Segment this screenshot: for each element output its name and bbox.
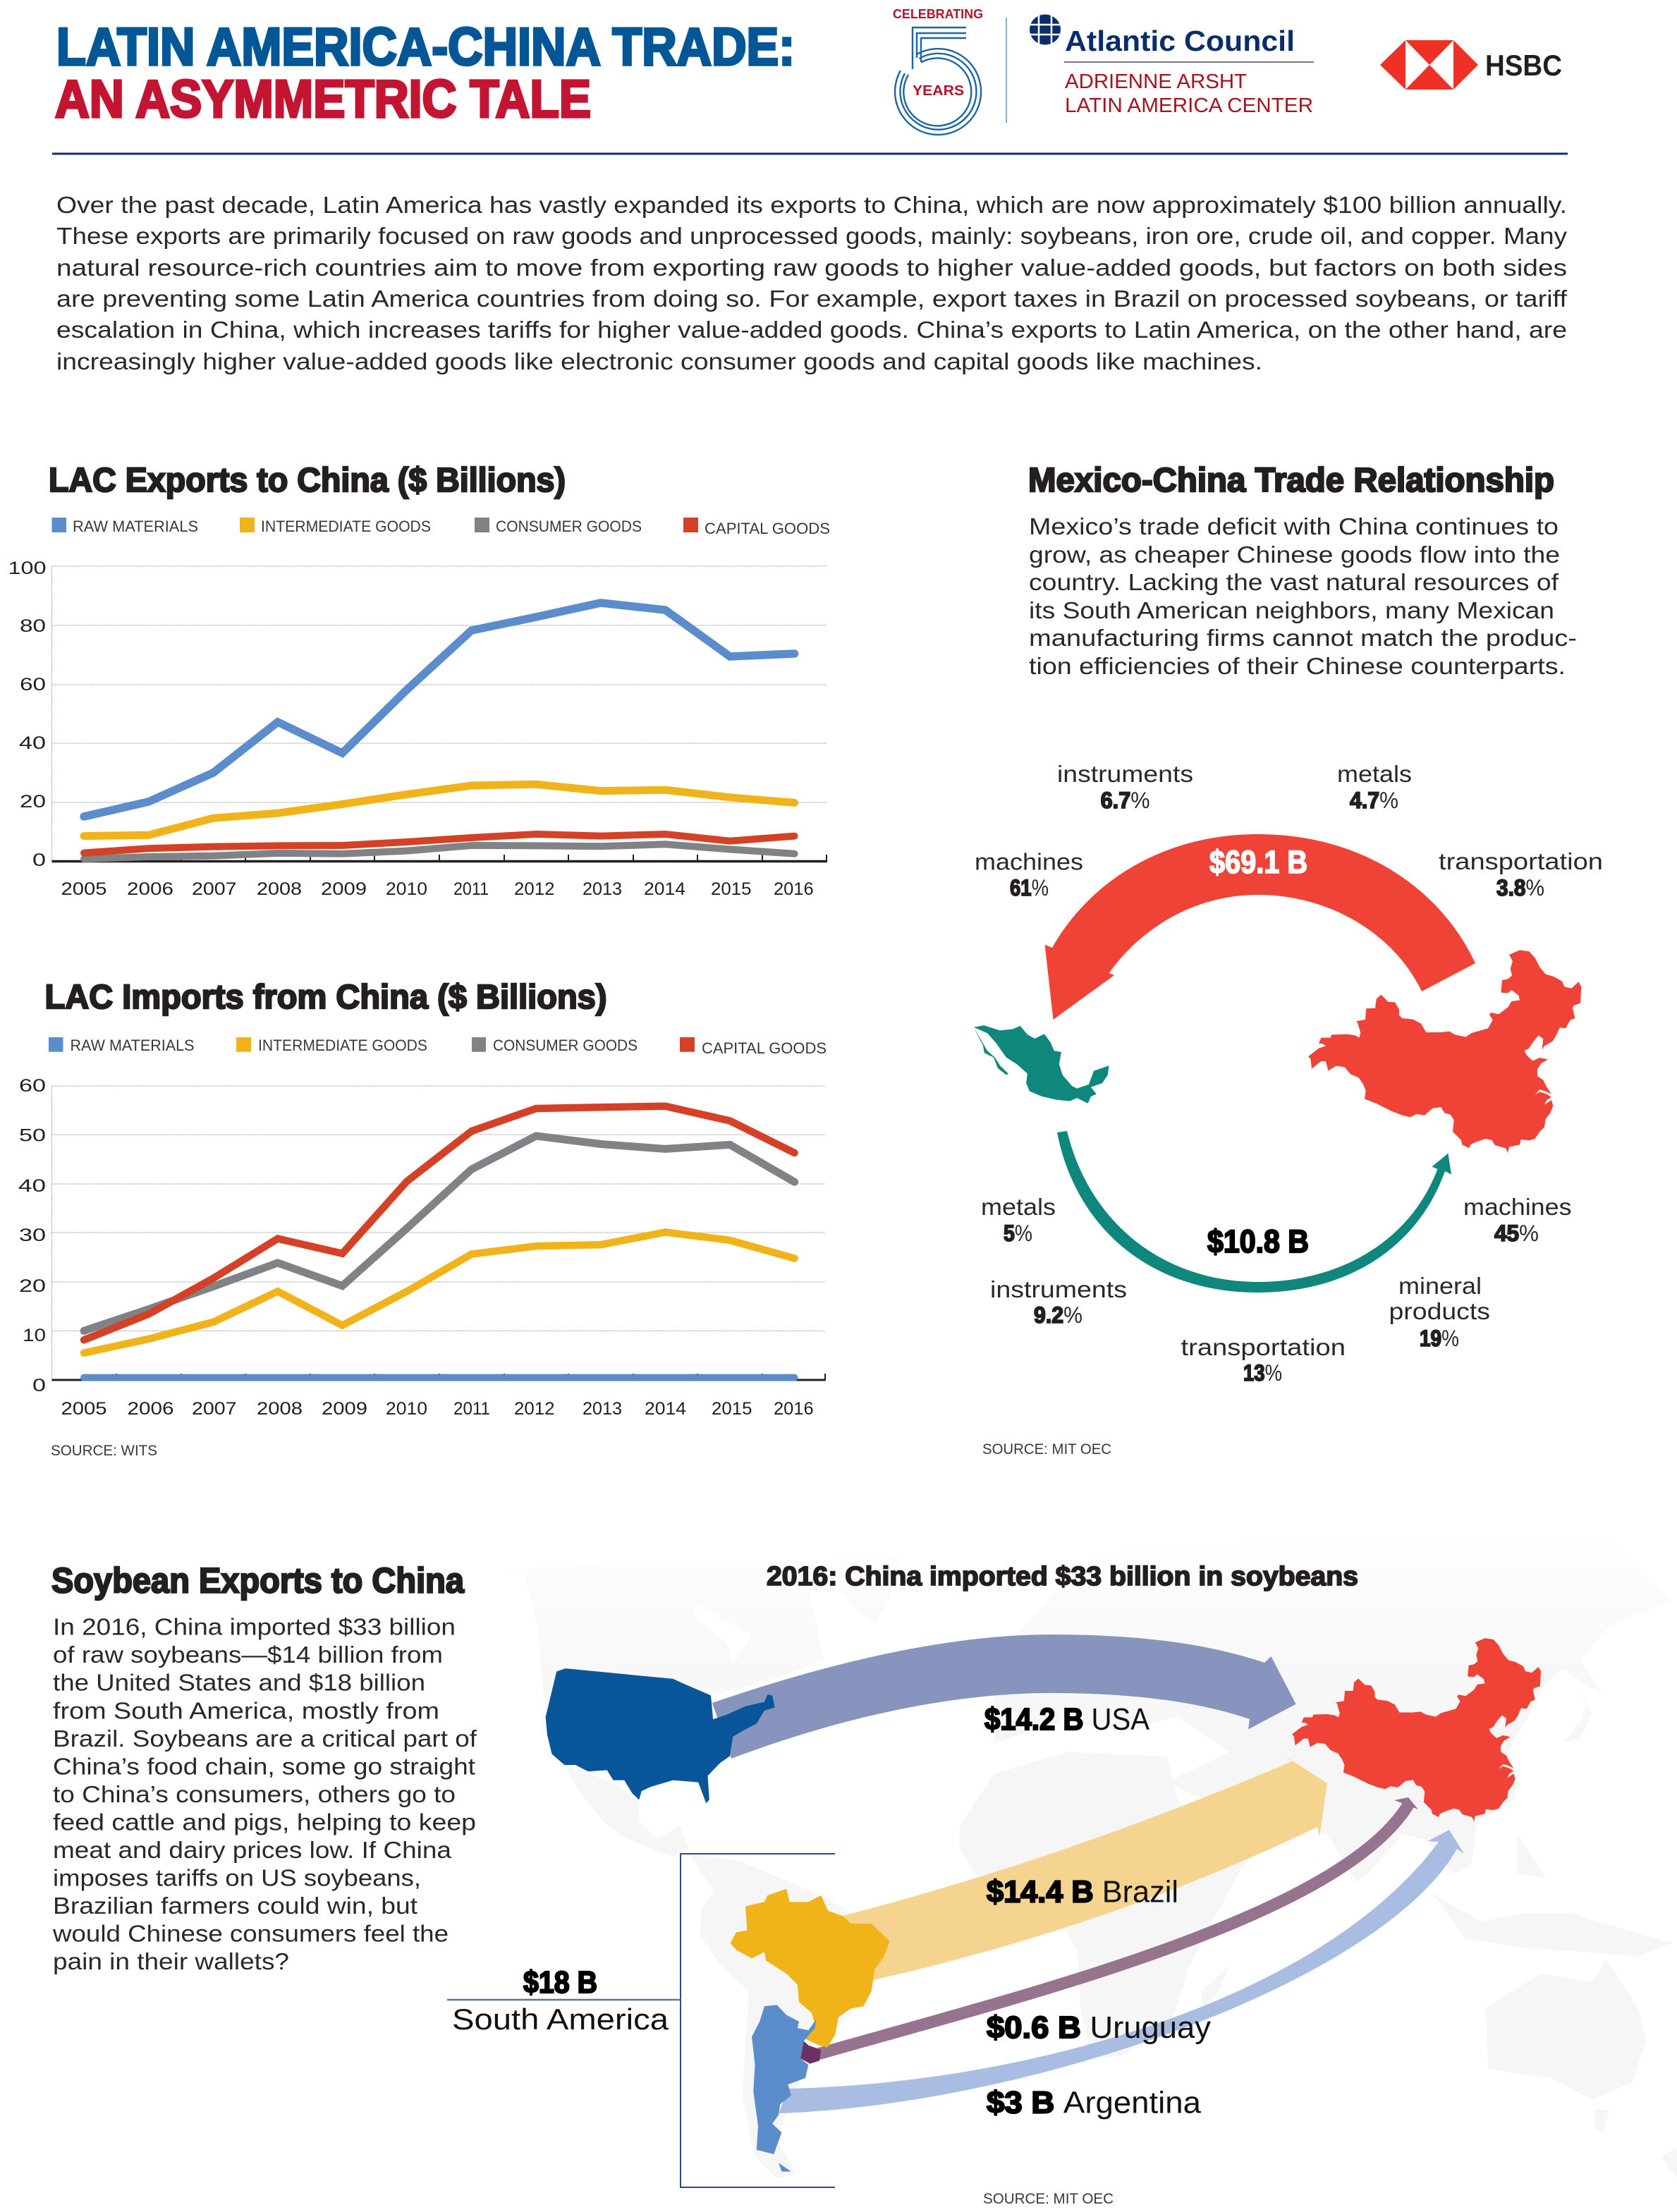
map: Mexico <box>974 1025 1109 1104</box>
intro paragraph: escalation in China, which increases tariffs for higher value-added goods. China’s exports to Latin America, on the other hand, are <box>56 317 1567 343</box>
text block: Mexico-China: its South American neighbors, many Mexican <box>1029 597 1554 623</box>
heading: 2016 China imports: 2016: China imported $33 billion in soybeans <box>767 1562 1358 1591</box>
chart: exports line chart: 2012 <box>514 879 554 899</box>
logo: Atlantic Council 5 years: YEARS <box>913 83 964 99</box>
text block: soybean exports: In 2016, China imported $33 billion <box>53 1614 456 1640</box>
chart: imports line chart <box>18 1076 825 1419</box>
labels: Mexico exports breakdown <box>981 1194 1571 1386</box>
chart: exports line chart <box>8 558 827 899</box>
intro paragraph: Over the past decade, Latin America has vastly expanded its exports to China, which are now approximately $100 billion annually. <box>56 192 1567 218</box>
labels: Mexico exports breakdown: 45% <box>1494 1221 1539 1246</box>
labels: China exports breakdown: metals <box>1337 761 1412 787</box>
text block: soybean exports: of raw soybeans—$14 billion from <box>53 1642 443 1668</box>
chart: exports line chart: 2008 <box>257 879 302 899</box>
labels: Mexico exports breakdown: mineral <box>1398 1273 1482 1299</box>
panel: Mexico-China trade relationship <box>974 462 1603 1458</box>
chart: imports line chart: 0 <box>32 1376 46 1395</box>
logo: Atlantic Council 5 years <box>893 7 1314 135</box>
label: Brazil value: $14.4 B Brazil <box>987 1874 1178 1909</box>
chart: exports line chart: 100 <box>8 558 47 578</box>
text block: Mexico-China: manufacturing firms cannot match the produc- <box>1029 625 1577 651</box>
source: MIT OEC soybeans: SOURCE: MIT OEC <box>983 2191 1114 2207</box>
title: LATIN AMERICA-CHINA TRADE: <box>56 17 795 76</box>
text block: soybean exports: imposes tariffs on US soybeans, <box>53 1865 421 1891</box>
intro paragraph: natural resource-rich countries aim to move from exporting raw goods to higher value-added goods, but factors on both sides <box>56 255 1567 281</box>
labels: Mexico exports breakdown: transportation <box>1181 1334 1346 1360</box>
chart: exports line chart: 2011 <box>453 879 489 899</box>
title: AN ASYMMETRIC TALE <box>55 69 591 128</box>
map: China <box>1308 950 1581 1153</box>
labels: Mexico exports breakdown: machines <box>1463 1194 1571 1220</box>
intro paragraph: increasingly higher value-added goods like electronic consumer goods and capital goods like machines. <box>56 348 1262 374</box>
label: Uruguay value: $0.6 B Uruguay <box>987 2010 1211 2045</box>
labels: China exports breakdown: transportation <box>1439 848 1603 874</box>
labels: China exports breakdown: 3.8% <box>1496 875 1544 900</box>
chart: exports line chart: 60 <box>20 675 46 695</box>
labels: Mexico exports breakdown: 5% <box>1004 1221 1032 1246</box>
label: $18 B South America <box>447 1965 681 2036</box>
labels: Mexico exports breakdown: products <box>1389 1298 1490 1324</box>
labels: China exports breakdown: 61% <box>1010 875 1049 900</box>
chart: imports line chart: 40 <box>18 1176 46 1196</box>
legend: imports: INTERMEDIATE GOODS <box>258 1037 427 1054</box>
value: $10.8 B: $10.8 B <box>1207 1223 1309 1259</box>
logo: Atlantic Council 5 years: CELEBRATING <box>893 7 983 21</box>
text block: soybean exports: from South America, mostly from <box>53 1697 439 1723</box>
chart: exports line chart: 2010 <box>386 879 427 899</box>
legend: imports: CAPITAL GOODS <box>702 1039 827 1057</box>
text block: soybean exports: to China’s consumers, others go to <box>53 1781 456 1807</box>
intro paragraph <box>56 192 1568 374</box>
logo: HSBC <box>1380 40 1562 90</box>
map: faint world background <box>494 1534 1677 2178</box>
text block: soybean exports: feed cattle and pigs, helping to keep <box>53 1809 476 1835</box>
legend: exports: INTERMEDIATE GOODS <box>261 518 431 535</box>
chart: imports line chart: 2005 <box>61 1399 107 1419</box>
map: USA <box>546 1668 775 1803</box>
chart: exports line chart: 40 <box>19 733 46 753</box>
legend: exports: CONSUMER GOODS <box>496 518 642 535</box>
chart: exports line chart: 2009 <box>321 879 367 899</box>
text block: soybean exports: Brazilian farmers could win, but <box>53 1893 417 1919</box>
map: China destination <box>1292 1638 1541 1821</box>
chart: imports line chart: 2010 <box>386 1399 427 1419</box>
chart: exports line chart: 2014 <box>644 879 685 899</box>
chart: imports line chart: 2013 <box>583 1399 622 1419</box>
chart: imports line chart: 50 <box>19 1125 46 1145</box>
text block: Mexico-China: country. Lacking the vast natural resources of <box>1029 569 1559 595</box>
legend: exports <box>52 518 830 537</box>
arrow: Argentina to China <box>779 1830 1464 2113</box>
chart: imports line chart: 2015 <box>712 1399 752 1419</box>
source: WITS: SOURCE: WITS <box>51 1443 157 1459</box>
labels: China exports breakdown: machines <box>975 849 1083 874</box>
chart: exports line chart: 2013 <box>583 879 622 899</box>
logo: Atlantic Council 5 years: Atlantic Council <box>1065 25 1295 57</box>
chart: imports line chart: 2009 <box>322 1399 367 1419</box>
legend: imports <box>49 1037 827 1057</box>
value: $69.1 B: $69.1 B <box>1209 844 1307 880</box>
legend: exports: CAPITAL GOODS <box>705 520 830 537</box>
title <box>55 17 795 128</box>
panel: soybean exports <box>51 1534 1677 2207</box>
legend: exports: RAW MATERIALS <box>73 518 198 535</box>
text block: soybean exports: Brazil. Soybeans are a critical part of <box>53 1725 477 1752</box>
map: Brazil <box>731 1889 890 2048</box>
intro paragraph: are preventing some Latin America countries from doing so. For example, export taxes in Brazil on processed soybeans, or tariff <box>56 286 1568 312</box>
legend: imports: RAW MATERIALS <box>71 1037 195 1054</box>
arrow: Uruguay to China <box>818 1797 1418 2054</box>
labels: Mexico exports breakdown: 19% <box>1420 1326 1459 1351</box>
heading: soybean exports: Soybean Exports to China <box>51 1561 465 1601</box>
panel: LAC exports chart <box>8 462 830 899</box>
label: Argentina value: $3 B Argentina <box>987 2086 1202 2120</box>
chart: exports line chart: 2015 <box>711 879 752 899</box>
chart: imports line chart: 30 <box>19 1226 46 1245</box>
text block: soybean exports <box>52 1614 477 1974</box>
chart: exports line chart: 2016 <box>774 879 814 899</box>
chart: exports line chart: 2006 <box>127 879 173 899</box>
chart: imports line chart: 2006 <box>127 1399 173 1419</box>
text block: Mexico-China <box>1029 513 1577 679</box>
labels: China exports breakdown: 4.7% <box>1350 788 1398 813</box>
chart: exports line chart: 20 <box>20 792 46 812</box>
arrow: China to Mexico exports <box>1045 834 1475 1020</box>
logo: HSBC: HSBC <box>1485 49 1562 82</box>
chart: exports line chart: 2007 <box>192 879 237 899</box>
chart: imports line chart: 60 <box>19 1076 46 1096</box>
text block: Mexico-China: grow, as cheaper Chinese goods flow into the <box>1029 542 1560 568</box>
arrow: Mexico to China exports <box>1057 1131 1451 1293</box>
label: $18 B South America: $18 B <box>523 1965 597 2000</box>
text block: soybean exports: China’s food chain, some go straight <box>53 1753 475 1779</box>
label: $18 B South America: South America <box>452 2003 669 2036</box>
map: Uruguay <box>800 2041 821 2064</box>
panel: LAC imports chart <box>18 979 827 1459</box>
chart: imports line chart: 2008 <box>257 1399 303 1419</box>
map: Argentina <box>752 2005 817 2172</box>
text block: soybean exports: meat and dairy prices low. If China <box>53 1837 452 1863</box>
labels: Mexico exports breakdown: 9.2% <box>1034 1302 1083 1328</box>
label: USA value: $14.2 B USA <box>984 1702 1150 1737</box>
intro paragraph: These exports are primarily focused on raw goods and unprocessed goods, mainly: soybeans, iron ore, crude oil, and copper. Many <box>56 223 1568 249</box>
heading: exports: LAC Exports to China ($ Billions) <box>49 462 566 499</box>
logo: Atlantic Council 5 years: LATIN AMERICA CENTER <box>1065 94 1313 117</box>
chart: imports line chart: 2014 <box>645 1399 686 1419</box>
labels: China exports breakdown <box>975 761 1603 900</box>
labels: China exports breakdown: instruments <box>1057 761 1193 787</box>
bracket: South America inset <box>681 1854 835 2187</box>
arrow: Brazil to China <box>843 1756 1327 1980</box>
chart: imports line chart: 2007 <box>192 1399 237 1419</box>
chart: imports line chart: 20 <box>19 1276 46 1296</box>
source: MIT OEC: SOURCE: MIT OEC <box>982 1441 1111 1458</box>
legend: imports: CONSUMER GOODS <box>493 1037 638 1054</box>
labels: Mexico exports breakdown: 13% <box>1243 1360 1282 1386</box>
logo: Atlantic Council 5 years: ADRIENNE ARSHT <box>1065 71 1247 93</box>
chart: imports line chart: 10 <box>23 1326 46 1345</box>
text block: soybean exports: would Chinese consumers feel the <box>52 1921 449 1947</box>
chart: imports line chart: 2012 <box>514 1399 554 1419</box>
labels: China exports breakdown: 6.7% <box>1101 788 1150 813</box>
chart: imports line chart: 2011 <box>453 1399 490 1419</box>
chart: exports line chart: 0 <box>32 850 46 870</box>
text block: Mexico-China: tion efficiencies of their Chinese counterparts. <box>1029 653 1566 679</box>
labels: Mexico exports breakdown: instruments <box>990 1276 1127 1302</box>
heading: imports: LAC Imports from China ($ Billions) <box>45 979 606 1016</box>
text block: soybean exports: pain in their wallets? <box>53 1948 289 1974</box>
text block: soybean exports: the United States and $18 billion <box>53 1670 425 1696</box>
heading: Mexico-China: Mexico-China Trade Relationship <box>1028 462 1554 499</box>
chart: exports line chart: 2005 <box>61 879 107 899</box>
chart: imports line chart: 2016 <box>774 1399 814 1419</box>
chart: exports line chart: 80 <box>20 616 46 636</box>
labels: Mexico exports breakdown: metals <box>981 1194 1056 1220</box>
text block: Mexico-China: Mexico’s trade deficit with China continues to <box>1029 513 1559 539</box>
arrow: USA to China <box>712 1634 1296 1759</box>
